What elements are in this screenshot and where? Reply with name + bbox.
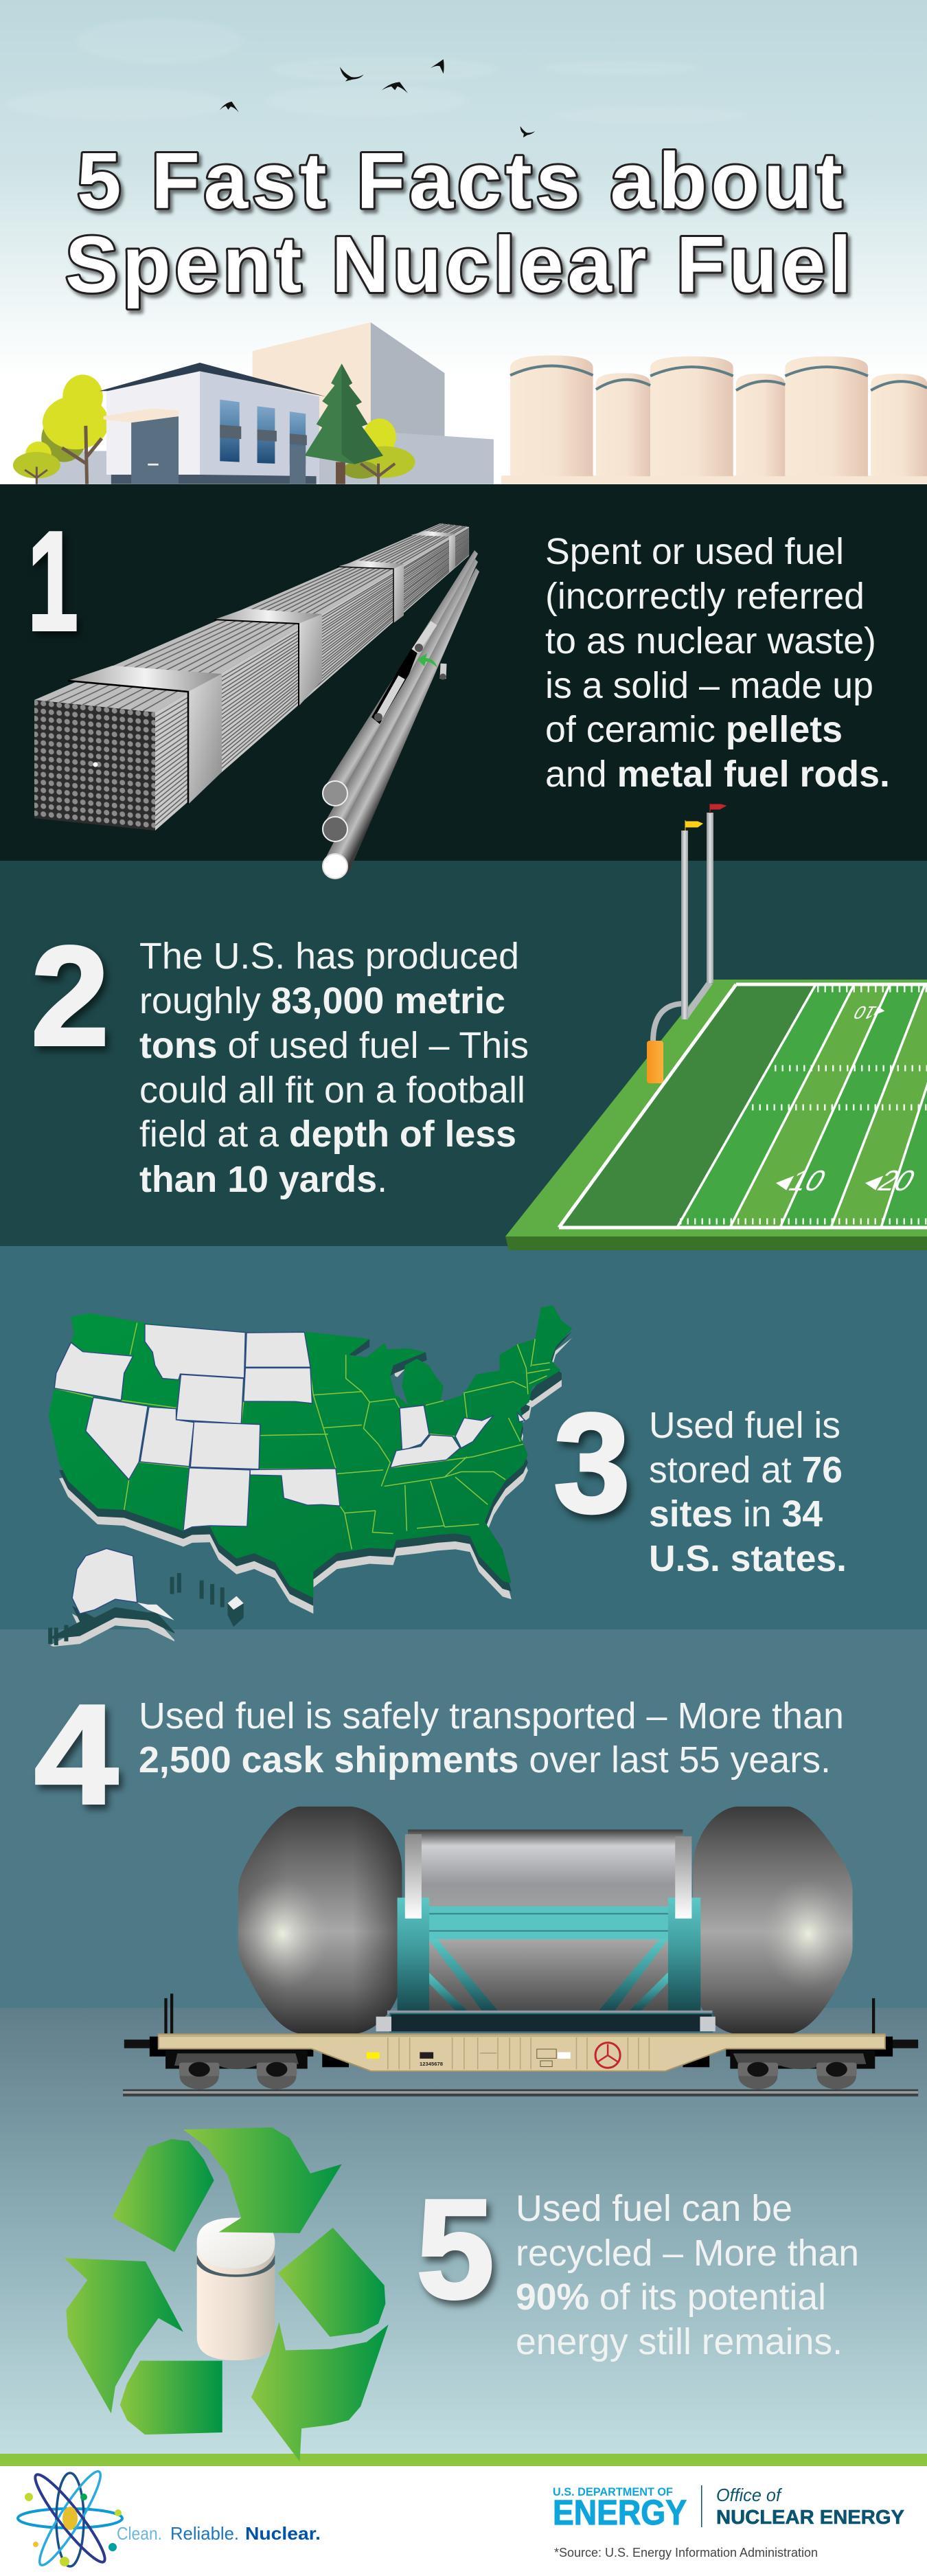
cask body [408,1829,683,2011]
yard numbers [768,1002,922,1197]
tagline: Clean. [117,2523,162,2544]
illustration: power plant building and trees [13,322,494,484]
cradle frame [376,1834,716,2032]
text: fact 1: is a solid – made up [545,665,873,706]
text: fact 4: Used fuel is safely transported – More than [139,1695,844,1737]
text: fact 5: energy still remains. [516,2321,843,2362]
text: fact 3: Used fuel is [649,1405,840,1446]
assembly end face [34,700,155,831]
panel: fact 5 background [0,2008,927,2454]
text: fact 4: 2,500 cask shipments over last 55 years. [139,1739,831,1781]
number 5: 5 [416,2170,494,2328]
cask row [510,355,927,476]
wheels [180,2064,856,2089]
illustration: recycling symbol with fuel pellet [64,2127,389,2461]
text: fact 2: than 10 yards. [139,1159,387,1200]
illustration: fuel assembly [34,523,469,831]
fuel pellet [197,2218,275,2360]
tree: right [343,418,415,484]
tagline: Reliable. [170,2523,239,2544]
main building [100,363,326,484]
coil springs [179,2063,857,2076]
illustration: storage casks [501,355,927,484]
recycling arrows [64,2127,389,2461]
text: fact 5 [516,2188,859,2362]
text: fact 1 [545,531,890,795]
yard numbers: ◂10 [850,1002,889,1022]
logo: Department of Energy: Office of [716,2485,783,2505]
map extrusion [59,1331,572,1614]
illustration: goal post [647,804,726,1083]
tree: small left [13,442,60,484]
panel: header sky [0,0,927,484]
text: fact 3: sites in 34 [649,1493,823,1535]
illustration: cask on rail car [123,1807,918,2097]
rod lines [47,523,469,826]
number 1: 1 [27,502,78,660]
text: fact 2: roughly 83,000 metric [139,980,505,1021]
text: fact 1: to as nuclear waste) [545,620,876,662]
text: fact 3: U.S. states. [649,1538,847,1579]
text: fact 5: recycled – More than [516,2233,859,2274]
panel: fact 2 background [0,861,927,1246]
icon: green arrow [417,653,437,668]
text: fact 5: Used fuel can be [516,2188,792,2229]
flags [685,804,726,831]
goal pad [647,1041,663,1083]
number 3: 3 [553,1384,630,1542]
panel: footer [0,2466,927,2576]
logo: Department of Energy: NUCLEAR ENERGY [716,2507,904,2529]
text: fact 4 [139,1695,844,1781]
text: fact 1: (incorrectly referred [545,576,865,617]
rail car bogies [124,1993,918,2089]
title [65,136,851,309]
panel: fact 4 background [0,1629,927,2008]
cutaway pellets [371,623,446,724]
panel: fact 1 background [0,484,927,861]
birds [219,59,535,137]
text: fact 2: The U.S. has produced [139,936,519,977]
text: fact 3 [649,1405,847,1579]
contiguous states [49,1305,572,1598]
text: fact 2: tons of used fuel – This [139,1025,529,1066]
rail track [123,2089,918,2097]
tagline [117,2523,321,2544]
logo: atom [18,2466,122,2571]
text: fact 1: and metal fuel rods. [545,754,890,795]
spacer grids [68,531,455,804]
panel: fact 3 background [0,1246,927,1629]
Alaska and Hawaii [50,1548,244,1647]
cask bands [510,366,927,390]
state borders [54,1323,550,1549]
impact limiters [236,1807,856,2033]
states without used fuel [54,1324,525,1531]
pine tree [304,363,383,484]
footer green rule [0,2454,927,2466]
title: 5 Fast Facts about [77,136,843,225]
tagline: Nuclear. [245,2523,321,2544]
logo: Department of Energy: ENERGY [553,2493,687,2532]
number 2: 2 [31,917,109,1075]
title: Spent Nuclear Fuel [65,220,851,309]
illustration: fuel rods [323,550,479,879]
hash marks [680,989,927,1221]
map: U.S. states with used fuel [49,1305,572,1647]
yard numbers: ◂20 [858,1164,922,1197]
text: fact 2: could all fit on a football [139,1070,525,1111]
text: fact 1: of ceramic pellets [545,709,843,750]
number 4: 4 [34,1675,118,1833]
flat car deck [159,2034,885,2071]
text: fact 3: stored at 76 [649,1449,843,1491]
logo: Department of Energy [553,2485,904,2532]
text: fact 2: field at a depth of less [139,1114,516,1155]
car number text: 12345678 [420,2062,443,2067]
tree: large left [41,374,108,484]
text: fact 1: Spent or used fuel [545,531,844,572]
logo: Department of Energy: U.S. DEPARTMENT OF [553,2485,673,2498]
source note: *Source: U.S. Energy Information Administration [554,2546,818,2560]
text: fact 2 [139,936,529,1200]
yard numbers: ◂10 [768,1164,832,1197]
clouds [6,19,745,123]
illustration: football field [505,980,927,1250]
text: fact 5: 90% of its potential [516,2276,826,2318]
